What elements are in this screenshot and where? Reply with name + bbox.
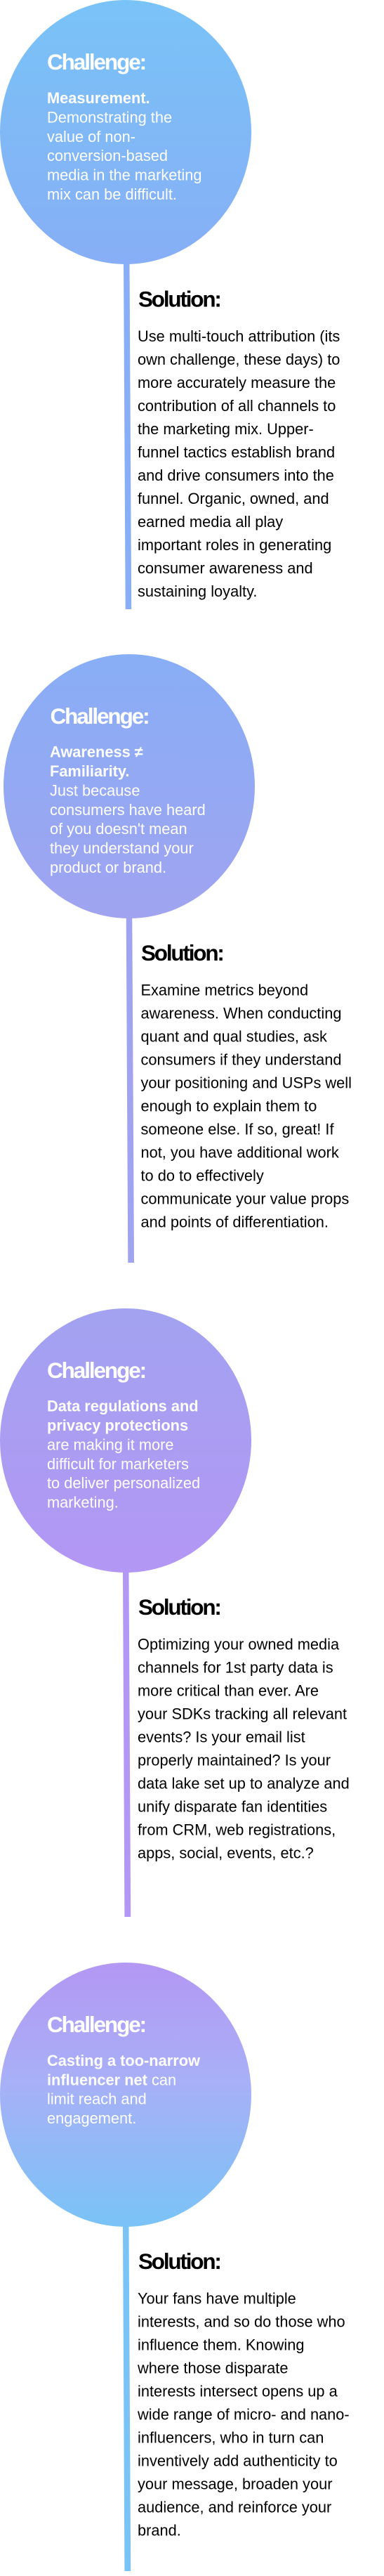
challenge heading 2: Challenge: — [51, 703, 149, 729]
solution text 2 — [140, 982, 352, 1231]
solution text 3: properly maintained? Is your — [138, 1752, 331, 1769]
solution text 2: consumers if they understand — [140, 1051, 341, 1069]
challenge circle 2 — [4, 654, 255, 918]
challenge text 2: they understand your — [50, 840, 194, 857]
challenge text 3: marketing. — [47, 1494, 119, 1511]
solution text 4: interests intersect opens up a — [138, 2383, 338, 2400]
challenge text 4: limit reach and — [47, 2090, 147, 2108]
solution text 2: communicate your value props — [140, 1190, 349, 1208]
challenge heading 3: Challenge: — [47, 1358, 145, 1383]
panel: awareness challenge and solution — [4, 654, 352, 1263]
challenge text 1 — [47, 89, 202, 203]
connector stem 4 — [123, 2226, 131, 2571]
challenge text 3: privacy protections — [47, 1417, 188, 1434]
solution text 2: to do to effectively — [140, 1167, 264, 1185]
solution text 1: funnel. Organic, owned, and — [138, 490, 329, 507]
solution text 4: wide range of micro- and nano- — [137, 2406, 350, 2424]
connector stem 3 — [123, 1572, 131, 1917]
solution text 3: channels for 1st party data is — [138, 1659, 333, 1677]
challenge text 1: value of non- — [47, 128, 135, 145]
solution heading 1: Solution: — [138, 287, 220, 312]
solution text 4: where those disparate — [137, 2360, 288, 2377]
solution text 3: your SDKs tracking all relevant — [138, 1705, 347, 1723]
solution heading 3: Solution: — [138, 1594, 220, 1620]
solution text 3: apps, social, events, etc.? — [138, 1845, 314, 1862]
solution text 2: your positioning and USPs well — [140, 1074, 352, 1092]
solution text 4: influence them. Knowing — [138, 2336, 305, 2354]
solution text 1: contribution of all channels to — [138, 397, 336, 415]
solution text 1: funnel tactics establish brand — [138, 443, 335, 461]
solution text 1: and drive consumers into the — [138, 467, 334, 484]
challenge text 3: are making it more — [47, 1436, 174, 1453]
challenge text 2: consumers have heard — [50, 801, 206, 819]
solution text 3: from CRM, web registrations, — [138, 1821, 336, 1839]
connector stem 2 — [126, 918, 134, 1263]
challenge text 2: Familiarity. — [50, 762, 129, 780]
challenge text 2: Awareness ≠ — [50, 743, 143, 761]
solution text 2: not, you have additional work — [140, 1144, 339, 1162]
solution text 1: earned media all play — [138, 513, 283, 531]
challenge text 2: Just because — [50, 781, 140, 799]
challenge circle 4 — [0, 1963, 251, 2227]
solution text 2: awareness. When conducting — [140, 1005, 341, 1022]
solution text 4: Your fans have multiple — [138, 2290, 296, 2308]
challenge text 2: product or brand. — [50, 859, 166, 876]
solution text 2: someone else. If so, great! If — [140, 1121, 334, 1138]
challenge text 4: engagement. — [47, 2109, 136, 2127]
challenge text 3 — [47, 1398, 200, 1511]
solution text 1: sustaining loyalty. — [138, 583, 257, 600]
challenge text 3: difficult for marketers — [47, 1455, 189, 1473]
challenge text 3: Data regulations and — [47, 1398, 199, 1415]
solution text 3: events? Is your email list — [138, 1729, 305, 1746]
solution heading 2: Solution: — [141, 940, 223, 965]
solution text 1: Use multi-touch attribution (its — [138, 327, 340, 345]
solution text 1: important roles in generating — [138, 536, 331, 554]
challenge text 1: Demonstrating the — [47, 108, 172, 126]
solution text 2: and points of differentiation. — [140, 1214, 329, 1231]
solution text 3: Optimizing your owned media — [138, 1636, 340, 1653]
solution text 2: Examine metrics beyond — [140, 982, 308, 999]
solution text 1: consumer awareness and — [138, 559, 313, 577]
challenge text 4: Casting a too-narrow — [47, 2052, 200, 2069]
solution text 3: unify disparate fan identities — [138, 1798, 327, 1816]
solution text 4: inventively add authenticity to — [138, 2452, 338, 2470]
solution text 4: influencers, who in turn can — [138, 2429, 324, 2447]
challenge circle 3 — [0, 1308, 251, 1573]
solution text 3 — [138, 1636, 350, 1862]
challenge text 4: influencer net can — [47, 2071, 176, 2088]
challenge text 3: to deliver personalized — [47, 1474, 200, 1492]
solution text 1: own challenge, these days) to — [138, 351, 340, 368]
challenge circle 1 — [0, 0, 251, 264]
panel: influencer challenge and solution — [0, 1963, 350, 2571]
solution text 4: audience, and reinforce your — [138, 2499, 331, 2516]
solution text 1: the marketing mix. Upper- — [138, 420, 314, 438]
challenge text 2: of you doesn't mean — [50, 820, 187, 838]
challenge text 1: conversion-based — [47, 147, 168, 164]
challenge heading 4: Challenge: — [47, 2012, 145, 2037]
connector stem 1 — [124, 264, 131, 609]
solution text 2: enough to explain them to — [140, 1098, 317, 1115]
solution heading 4: Solution: — [138, 2249, 220, 2274]
challenge heading 1: Challenge: — [47, 49, 145, 74]
challenge text 2 — [50, 743, 206, 876]
solution text 3: more critical than ever. Are — [138, 1682, 319, 1700]
panel: data regulations challenge and solution — [0, 1308, 350, 1917]
solution text 1: more accurately measure the — [138, 374, 336, 391]
solution text 3: data lake set up to analyze and — [138, 1775, 350, 1793]
solution text 4: interests, and so do those who — [138, 2313, 345, 2331]
panel: measurement challenge and solution — [0, 0, 340, 609]
challenge text 1: Measurement. — [47, 89, 150, 107]
solution text 4 — [137, 2290, 350, 2539]
solution text 2: quant and qual studies, ask — [140, 1028, 327, 1046]
challenge text 4 — [47, 2052, 200, 2127]
solution text 4: brand. — [138, 2522, 181, 2539]
challenge text 1: media in the marketing — [47, 167, 202, 184]
solution text 4: your message, broaden your — [138, 2476, 332, 2493]
solution text 1 — [138, 327, 340, 600]
challenge text 1: mix can be difficult. — [47, 186, 177, 203]
